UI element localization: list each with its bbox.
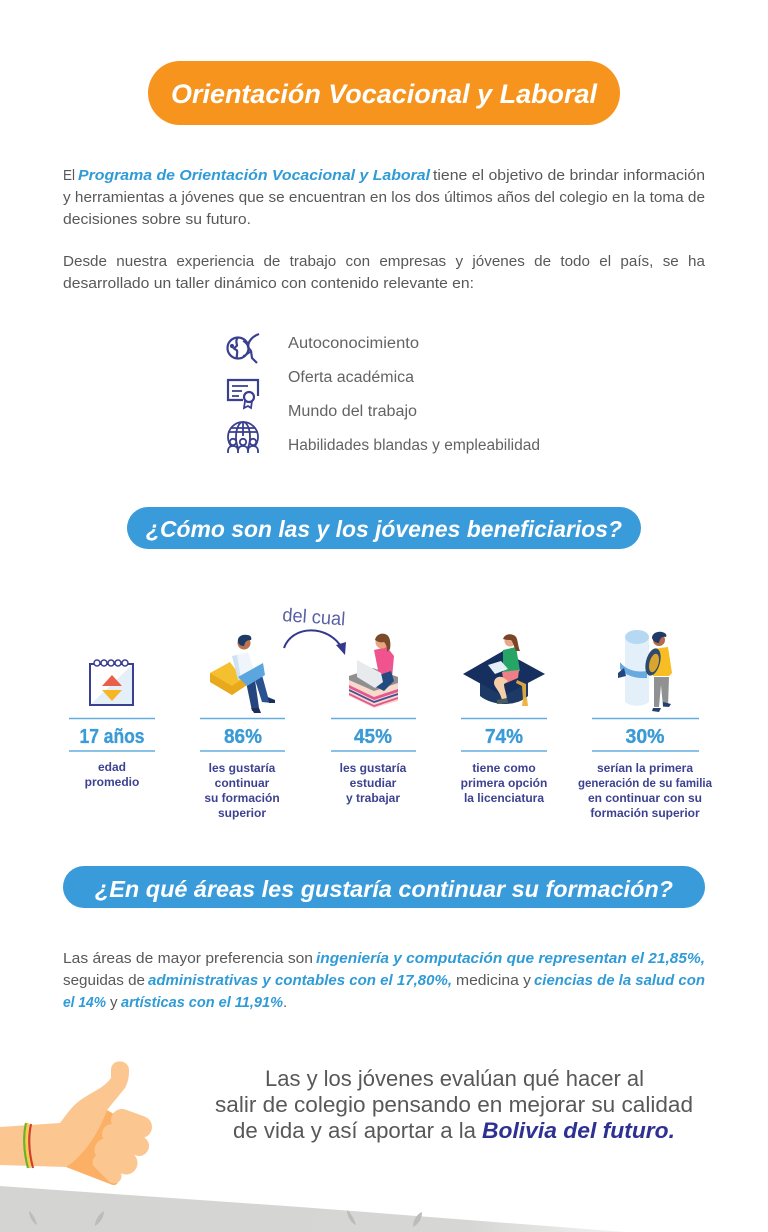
second paragraph: Desde nuestra experiencia de trabajo con empresas y jóvenes de todo el país, se ha [63, 253, 706, 270]
section heading: beneficiaries: ¿Cómo son las y los jóvenes beneficiarios? [146, 516, 622, 542]
closing statement: Bolivia del futuro. [482, 1118, 675, 1143]
areas paragraph: Las áreas de mayor preferencia son [63, 950, 313, 967]
stat: 30% [578, 718, 712, 820]
stat: 86%: superior [218, 806, 266, 820]
arrow [284, 630, 346, 655]
areas paragraph: y [110, 994, 118, 1011]
stat: 30%: generación de su familia [578, 776, 712, 790]
section heading: areas [63, 866, 705, 908]
list of workshop topics: Habilidades blandas y empleabilidad [288, 437, 540, 454]
areas paragraph: el 14% [63, 994, 106, 1011]
stat: 30%: en continuar con su [588, 791, 702, 805]
areas paragraph: artísticas con el 11,91% [121, 994, 283, 1011]
areas paragraph: . [283, 994, 287, 1011]
icon: globe with people [228, 422, 258, 453]
areas paragraph: administrativas y contables con el 17,80%, [148, 972, 452, 989]
stat: 17 años: 17 años [80, 726, 144, 748]
stat: 74% [461, 718, 547, 805]
list of workshop topics: Oferta académica [288, 369, 414, 386]
list of workshop topics: Mundo del trabajo [288, 403, 417, 420]
stat: 86%: su formación [204, 791, 280, 805]
stat: 45%: les gustaría [340, 761, 407, 775]
stat: 45% [331, 718, 416, 805]
intro paragraph: tiene el objetivo de brindar información [433, 167, 705, 184]
icon: certificate [228, 380, 258, 408]
second paragraph [63, 253, 706, 292]
title banner [148, 61, 620, 125]
stat: 74%: 74% [485, 726, 523, 748]
icon: calendar [90, 660, 133, 705]
closing statement: de vida y así aportar a la [233, 1118, 477, 1143]
list of workshop topics [288, 335, 540, 454]
stat: 74%: la licenciatura [464, 791, 544, 805]
areas paragraph: ciencias de la salud con [534, 972, 705, 989]
second paragraph: desarrollado un taller dinámico con contenido relevante en: [63, 275, 474, 292]
stat: 86%: les gustaría [209, 761, 276, 775]
stat: 30%: formación superior [590, 806, 700, 820]
intro paragraph: El [63, 167, 75, 184]
stat: 86%: 86% [224, 726, 262, 748]
intro paragraph: Programa de Orientación Vocacional y Laboral [78, 167, 431, 184]
intro paragraph [63, 167, 705, 228]
stat: 45%: y trabajar [346, 791, 400, 805]
closing statement: Las y los jóvenes evalúan qué hacer al [265, 1066, 644, 1091]
stat: 30%: serían la primera [597, 761, 693, 775]
label: del cual: del cual [282, 605, 346, 630]
stat: 74%: tiene como [472, 761, 536, 775]
section heading: areas: ¿En qué áreas les gustaría continuar su formación? [95, 876, 673, 902]
section heading: beneficiaries [127, 507, 641, 549]
stat: 86%: continuar [215, 776, 270, 790]
stat: 17 años: edad [98, 760, 126, 774]
illustration: thumbs-up hand [0, 1061, 141, 1185]
illustration: young man with laptop on cushion [210, 635, 275, 713]
stat: 30%: 30% [626, 726, 665, 748]
areas paragraph [63, 950, 705, 1011]
stat: 45%: 45% [354, 726, 392, 748]
stat: 17 años [69, 718, 155, 789]
areas paragraph: seguidas de [63, 972, 145, 989]
closing statement: salir de colegio pensando en mejorar su calidad [215, 1092, 693, 1117]
illustration: young woman with laptop on books [349, 634, 398, 708]
footer floor band [0, 1186, 625, 1232]
closing statement [215, 1066, 693, 1143]
stat: 45%: estudiar [350, 776, 397, 790]
areas paragraph: medicina y [456, 972, 532, 989]
intro paragraph: y herramientas a jóvenes que se encuentran en los dos últimos años del colegio en la toma de [63, 189, 705, 206]
illustration: student with diploma [618, 630, 672, 712]
areas paragraph: ingeniería y computación que representan el 21,85%, [316, 950, 705, 967]
stat: 74%: primera opción [461, 776, 547, 790]
list of workshop topics: Autoconocimiento [288, 335, 419, 352]
intro paragraph: decisiones sobre su futuro. [63, 211, 251, 228]
illustration: student on graduation cap [463, 634, 545, 706]
stat: 86% [200, 718, 285, 820]
icon: faces in profile [228, 334, 259, 363]
stat: 17 años: promedio [85, 775, 139, 789]
title banner: Orientación Vocacional y Laboral [171, 79, 597, 109]
